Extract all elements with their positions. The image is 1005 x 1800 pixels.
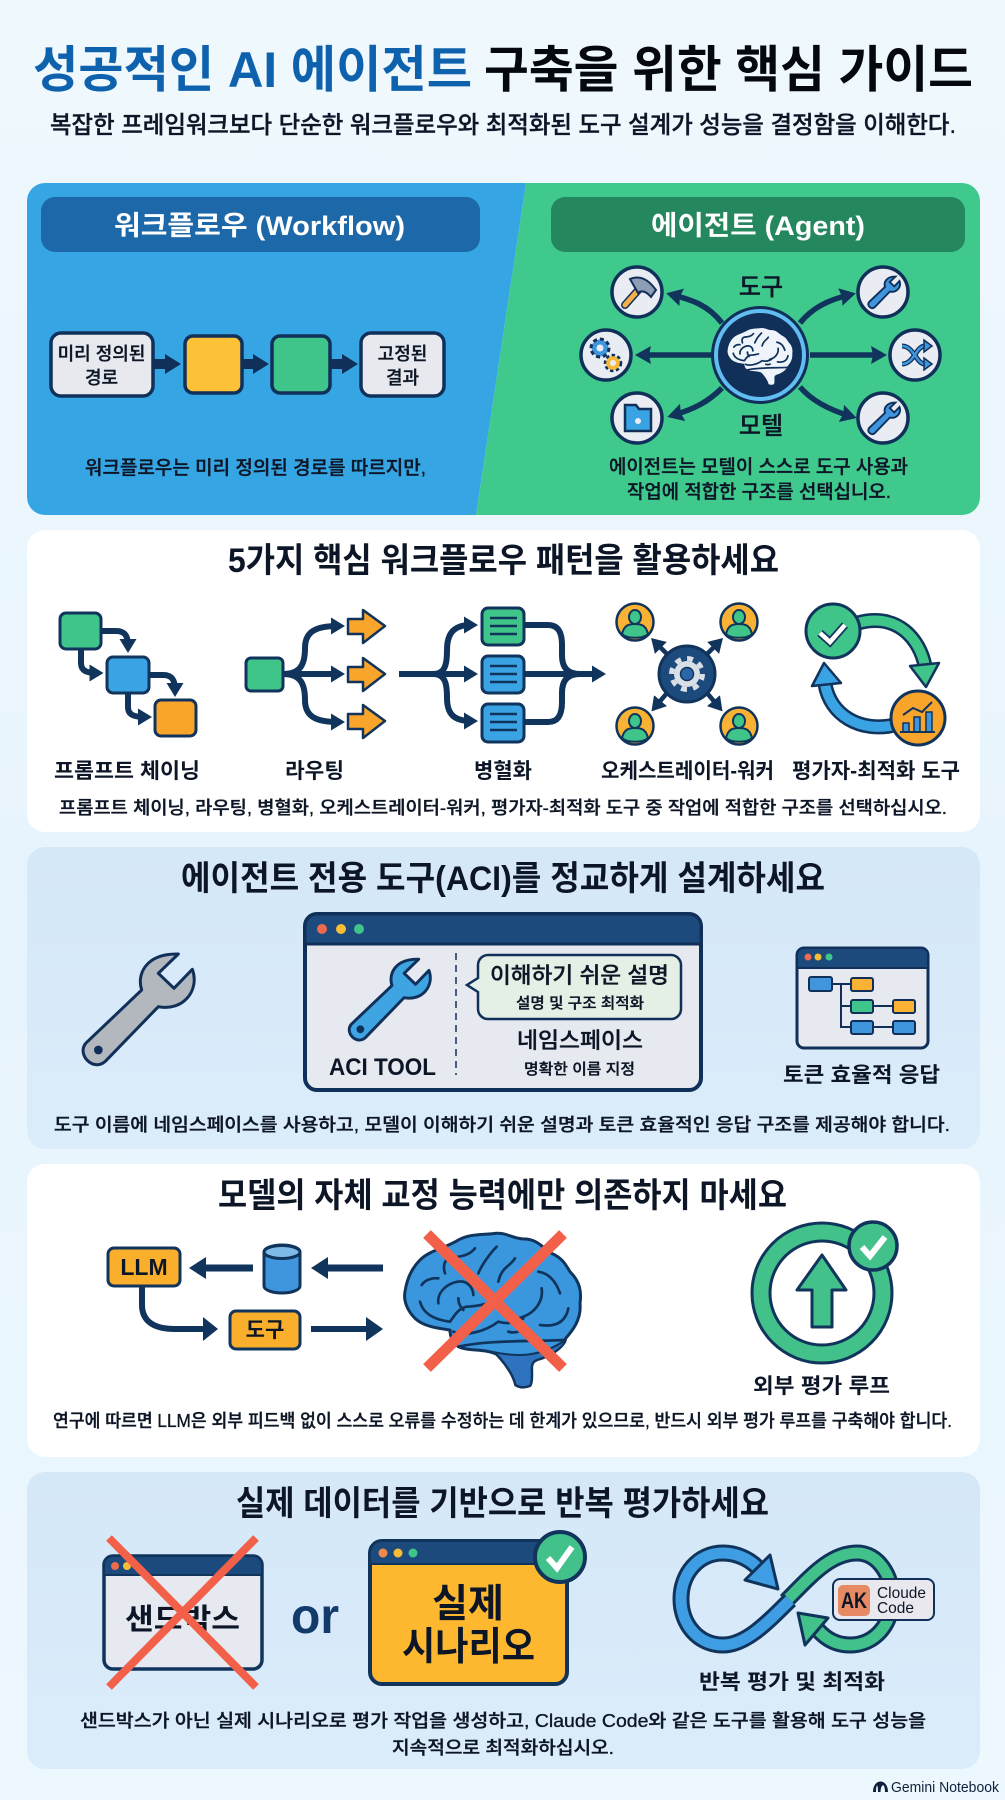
label: namespace: 네임스페이스 (517, 1028, 643, 1053)
badge: Claude Code (833, 1579, 934, 1620)
icon: infinity loop (681, 1553, 892, 1645)
workflow flow diagram: 결과 (386, 368, 419, 388)
icon: gray wrench (83, 954, 194, 1065)
workflow flow diagram (51, 333, 444, 396)
heading: 5가지 핵심 워크플로우 패턴을 활용하세요 (228, 542, 779, 580)
window: ACI tool (305, 914, 701, 1090)
agent header (551, 197, 965, 252)
label: namespace: 명확한 이름 지정 (524, 1061, 635, 1078)
icon: orchestrator-worker (616, 604, 758, 744)
pattern labels: 평가자-최적화 도구 (792, 760, 960, 783)
workflow flow diagram: 경로 (85, 368, 118, 388)
icon: wrench bottom (858, 393, 908, 443)
agent half background (476, 183, 980, 515)
label: namespace (517, 1028, 643, 1078)
label: ACI TOOL: ACI TOOL (329, 1054, 436, 1081)
title: 성공적인 AI 에이전트 (33, 42, 472, 98)
window: real scenario: 시나리오 (402, 1626, 535, 1669)
agent arrows (642, 295, 880, 416)
window: token efficient response (797, 948, 928, 1048)
panel: workflow vs agent (27, 183, 980, 515)
agent header: 에이전트 (Agent) (651, 211, 865, 241)
caption: 샌드박스가 아닌 실제 시나리오로 평가 작업을 생성하고, Claude Code와 같은 도구를 활용해 도구 성능을 (80, 1711, 926, 1731)
agent caption: 에이전트는 모텔이 스스로 도구 사용과 (609, 456, 908, 478)
label: external loop: 외부 평가 루프 (753, 1375, 890, 1398)
label: model: 모텔 (739, 413, 783, 440)
caption: 지속적으로 최적화하십시오. (392, 1738, 614, 1758)
heading: 실제 데이터를 기반으로 반복 평가하세요 (236, 1485, 769, 1523)
callout: easy description: 이해하기 쉬운 설명 (490, 963, 669, 988)
agent caption: 작업에 적합한 구조를 선택십니오. (627, 481, 891, 503)
agent caption (609, 456, 908, 503)
subtitle: 복잡한 프레임워크보다 단순한 워크플로우와 최적화된 도구 설계가 성능을 결정함을 이해한다. (50, 112, 956, 139)
heading: 에이전트 전용 도구(ACI)를 정교하게 설계하세요 (181, 860, 825, 898)
workflow caption: 워크플로우는 미리 정의된 경로를 따르지만, (85, 457, 426, 479)
caption: 연구에 따르면 LLM은 외부 피드백 없이 스스로 오류를 수정하는 데 한계가 있으므로, 반드시 외부 평가 루프를 구축해야 합니다. (53, 1411, 952, 1431)
workflow half background (27, 183, 526, 515)
icon: shuffle (890, 330, 940, 380)
icon: external loop (761, 1222, 897, 1354)
panel: iterative evaluation (27, 1472, 980, 1769)
window: sandbox crossed out (104, 1538, 262, 1687)
caption: 프롬프트 체이닝, 라우팅, 병혈화, 오케스트레이터-워커, 평가자-최적화 도구 중 작업에 적합한 구조를 선택하십시오. (59, 798, 947, 818)
workflow flow diagram: 고정된 (378, 344, 427, 364)
flow diagram: LLM: 도구 (246, 1319, 284, 1342)
panel: external evaluation (27, 1164, 980, 1457)
icon: parallelization (399, 608, 599, 742)
pattern labels: 오케스트레이터-워커 (601, 760, 774, 783)
label: or: or (291, 1588, 339, 1644)
flow diagram: LLM: LLM (120, 1254, 168, 1280)
workflow header (41, 197, 480, 252)
icon: blue wrench (349, 959, 430, 1040)
icon: crossed out brain (405, 1233, 581, 1387)
title: 구축을 위한 핵심 가이드 (484, 42, 973, 98)
caption: 도구 이름에 네임스페이스를 사용하고, 모델이 이해하기 쉬운 설명과 토큰 효율적인 응답 구조를 제공해야 합니다. (54, 1115, 950, 1135)
badge: Claude Code: Cloude (877, 1585, 926, 1602)
title (33, 42, 973, 98)
window: real scenario: 실제 (432, 1583, 504, 1626)
icon: routing (246, 610, 385, 738)
caption (80, 1711, 926, 1758)
pattern labels: 프롬프트 체이닝 (54, 760, 200, 783)
badge: Claude Code: AK (841, 1588, 867, 1613)
agent brain hub (711, 306, 809, 404)
icon: check badge (535, 1532, 585, 1582)
panel: ACI tool design (27, 847, 980, 1149)
window: sandbox crossed out: 샌드박스 (125, 1603, 240, 1636)
pattern labels: 라우팅 (285, 760, 344, 783)
icon: folder (612, 393, 662, 443)
icon: wrench top (858, 267, 908, 317)
panel: five workflow patterns (27, 530, 980, 832)
pattern labels (54, 760, 960, 783)
pattern labels: 병혈화 (474, 760, 532, 783)
icon: prompt chaining (60, 613, 196, 736)
label: token efficient: 토큰 효율적 응답 (783, 1064, 940, 1087)
label: iterate: 반복 평가 및 최적화 (699, 1671, 885, 1694)
label: tools: 도구 (739, 274, 783, 301)
flow diagram: LLM (108, 1245, 383, 1349)
workflow flow diagram: 미리 정의된 (58, 344, 145, 364)
icon: gears (581, 330, 631, 380)
window: real scenario (370, 1532, 585, 1684)
workflow header: 워크플로우 (Workflow) (114, 211, 405, 241)
icon: evaluator-optimizer (806, 604, 945, 745)
callout: easy description: 설명 및 구조 최적화 (516, 995, 644, 1012)
badge: Claude Code: Code (877, 1600, 914, 1617)
watermark: Gemini Notebook: Gemini Notebook (891, 1780, 1000, 1796)
callout: easy description (467, 955, 681, 1019)
icon: hammer (612, 267, 662, 317)
heading: 모델의 자체 교정 능력에만 의존하지 마세요 (218, 1177, 787, 1215)
